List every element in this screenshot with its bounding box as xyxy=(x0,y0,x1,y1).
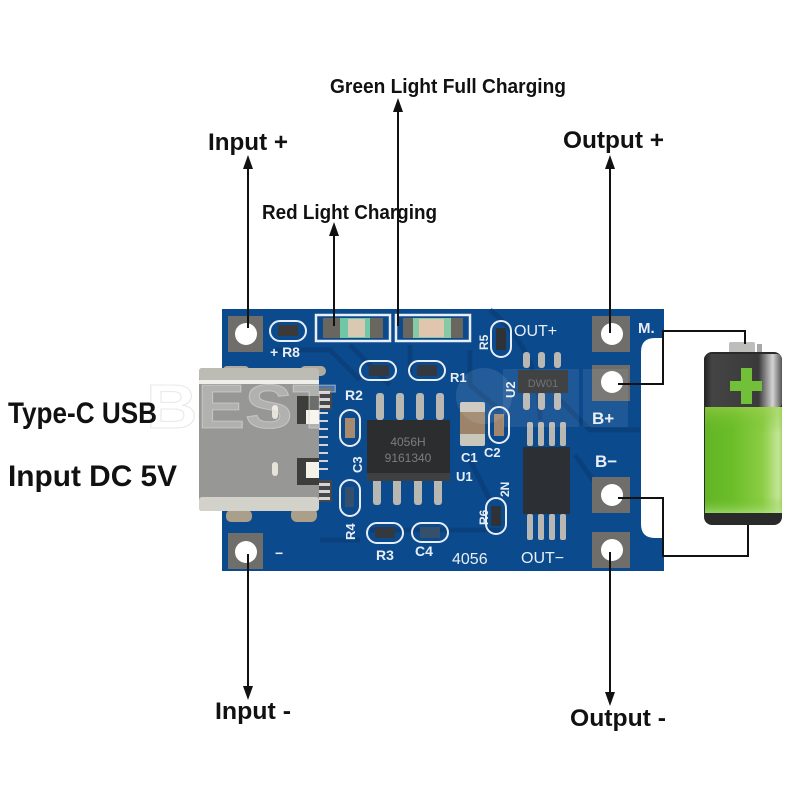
circuit board xyxy=(146,309,664,571)
silkscreen labels: C3 xyxy=(350,456,365,473)
silkscreen labels: + R8 xyxy=(270,344,300,360)
chip U1 4056H xyxy=(367,393,450,505)
mounting pads xyxy=(228,316,630,569)
label: output plus: Output + xyxy=(563,127,664,154)
board substrate xyxy=(222,309,664,571)
chip U2 DW01 xyxy=(518,352,568,410)
silkscreen labels: R1 xyxy=(450,370,467,385)
silkscreen labels: B− xyxy=(595,452,617,471)
watermark: BEST xyxy=(146,373,336,442)
silkscreen labels: B+ xyxy=(592,409,614,428)
silkscreen labels: 2N xyxy=(498,482,512,497)
silkscreen labels: R3 xyxy=(376,547,394,563)
silkscreen labels: OUT+ xyxy=(514,323,557,340)
chip U1 4056H: 9161340 xyxy=(385,451,432,465)
battery wires xyxy=(618,331,748,556)
silkscreen labels: R4 xyxy=(343,523,358,540)
plus sign xyxy=(730,368,762,404)
battery casing xyxy=(704,352,782,525)
label: green light: Green Light Full Charging xyxy=(330,76,566,98)
silkscreen labels: U2 xyxy=(503,381,518,398)
silkscreen labels: C4 xyxy=(415,543,433,559)
small SMD parts xyxy=(270,321,511,543)
chip U2 DW01: DW01 xyxy=(528,378,558,390)
silkscreen labels: − xyxy=(275,545,283,561)
label: red light: Red Light Charging xyxy=(262,202,437,224)
silkscreen labels: 4056 xyxy=(452,551,488,568)
silkscreen labels: R6 xyxy=(477,509,491,525)
chip 8205 xyxy=(523,422,570,540)
watermark xyxy=(146,368,628,442)
label: input plus: Input + xyxy=(208,129,288,156)
label: input dc 5v: Input DC 5V xyxy=(8,460,177,493)
arrow: red light xyxy=(329,222,339,326)
arrow: output plus xyxy=(605,155,615,333)
arrow: input minus xyxy=(243,554,253,700)
battery xyxy=(704,342,782,525)
silkscreen labels: M. xyxy=(638,320,655,337)
silkscreen labels: OUT− xyxy=(521,550,564,567)
label: output minus: Output - xyxy=(570,705,666,732)
silkscreen labels: U1 xyxy=(456,469,473,484)
label: type-c usb: Type-C USB xyxy=(8,397,157,430)
silkscreen labels: R5 xyxy=(477,334,491,350)
silkscreen labels: R2 xyxy=(345,387,363,403)
silkscreen labels: C1 xyxy=(461,450,478,465)
arrow: output minus xyxy=(605,552,615,706)
label: input minus: Input - xyxy=(215,698,291,725)
silkscreen labels xyxy=(270,320,655,568)
USB-C connector xyxy=(199,366,332,522)
arrow: input plus xyxy=(243,155,253,328)
arrow: green light xyxy=(393,98,403,326)
battery terminal xyxy=(729,342,755,354)
LEDs xyxy=(316,315,470,341)
chip U1 4056H: 4056H xyxy=(390,435,426,449)
silkscreen labels: C2 xyxy=(484,445,501,460)
